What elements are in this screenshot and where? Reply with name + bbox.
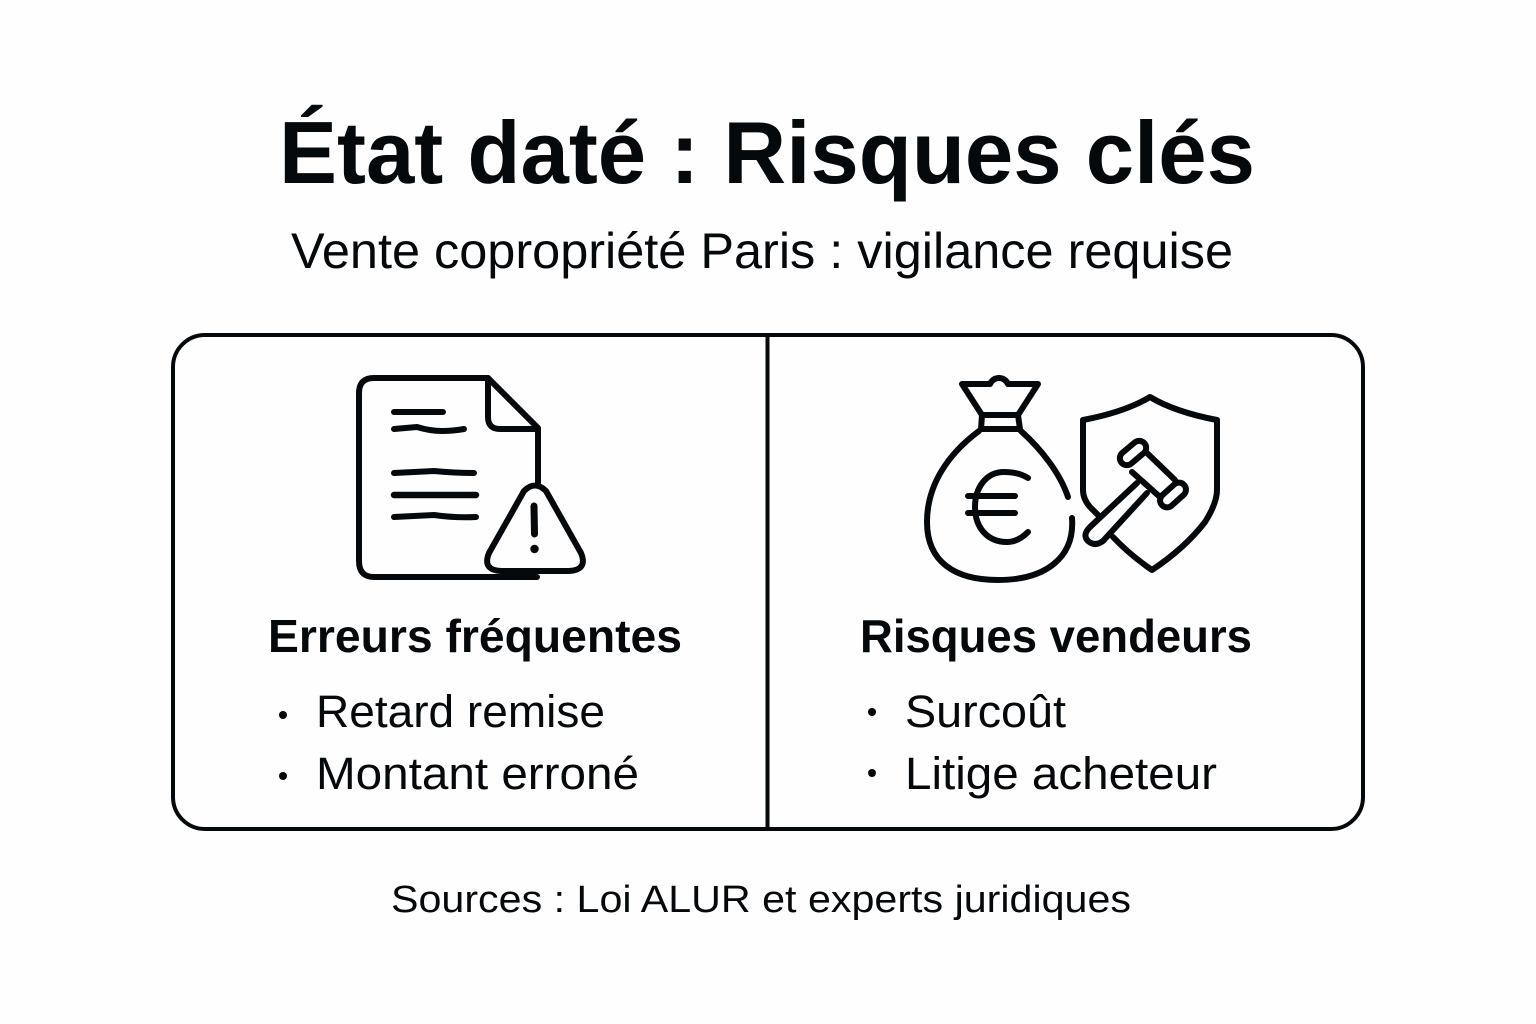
subtitle: Vente copropriété Paris : vigilance requise xyxy=(291,223,1233,279)
list: erreurs xyxy=(279,686,639,799)
icon: shield with gavel xyxy=(1083,397,1217,570)
list: risques: Litige acheteur xyxy=(905,748,1217,799)
icon: document with warning triangle xyxy=(359,378,583,577)
sources note: Sources : Loi ALUR et experts juridiques xyxy=(391,879,1131,921)
panel: two-column frame xyxy=(173,335,1363,829)
panel: risques vendeurs xyxy=(860,378,1252,799)
list: risques: Surcoût xyxy=(905,686,1067,737)
title: État daté : Risques clés xyxy=(279,103,1255,202)
list: erreurs: Montant erroné xyxy=(316,748,639,799)
heading: risques vendeurs: Risques vendeurs xyxy=(860,610,1252,662)
panel: erreurs fréquentes xyxy=(268,378,682,799)
list: erreurs: Retard remise xyxy=(316,686,605,737)
heading: erreurs fréquentes: Erreurs fréquentes xyxy=(268,610,682,662)
icon: money bag with euro sign xyxy=(927,378,1072,580)
list: risques xyxy=(868,686,1217,799)
